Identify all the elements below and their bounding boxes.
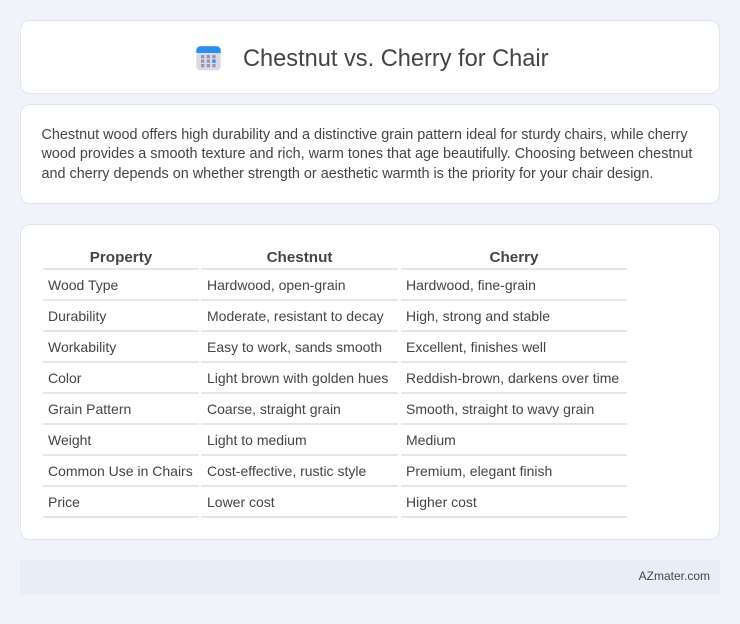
table: Moderate, resistant to decay: [207, 308, 384, 324]
title: Chestnut vs. Cherry for Chair: [243, 46, 549, 72]
footer credit: AZmater.com: [639, 569, 710, 583]
table: [43, 249, 627, 518]
summary text: [42, 126, 692, 182]
table: Smooth, straight to wavy grain: [406, 401, 594, 417]
footer bar: [20, 560, 720, 594]
summary text: wood provides a smooth texture and rich, warm tones that age beautifully. Choosing between chestnut: [42, 146, 692, 162]
table: Color: [48, 370, 81, 386]
table: High, strong and stable: [406, 308, 550, 324]
panel: summary card: [20, 104, 720, 204]
icon: calendar: [196, 46, 221, 70]
panel: title card: [20, 20, 720, 94]
panel: comparison table card: [20, 224, 720, 540]
table: Lower cost: [207, 494, 275, 510]
table: Grain Pattern: [48, 401, 131, 417]
header: Cherry: Cherry: [490, 249, 538, 266]
table: Workability: [48, 339, 116, 355]
table: Premium, elegant finish: [406, 463, 552, 479]
table: Medium: [406, 432, 456, 448]
header: Property: Property: [90, 249, 152, 266]
table: Wood Type: [48, 277, 118, 293]
table: Easy to work, sands smooth: [207, 339, 382, 355]
header: Chestnut: Chestnut: [267, 249, 332, 266]
summary text: and cherry depends on whether strength or aesthetic warmth is the priority for your chair design.: [42, 166, 653, 182]
table: Cost-effective, rustic style: [207, 463, 366, 479]
table: Hardwood, fine-grain: [406, 277, 536, 293]
table: Hardwood, open-grain: [207, 277, 346, 293]
table: Weight: [48, 432, 91, 448]
summary text: Chestnut wood offers high durability and a distinctive grain pattern ideal for sturdy chairs, while cherry: [42, 126, 688, 142]
table: Reddish-brown, darkens over time: [406, 370, 619, 386]
table: Higher cost: [406, 494, 477, 510]
table: Durability: [48, 308, 106, 324]
table: Light brown with golden hues: [207, 370, 388, 386]
table: Excellent, finishes well: [406, 339, 546, 355]
table: Common Use in Chairs: [48, 463, 193, 479]
table: Price: [48, 494, 80, 510]
table: Coarse, straight grain: [207, 401, 341, 417]
table: Light to medium: [207, 432, 307, 448]
